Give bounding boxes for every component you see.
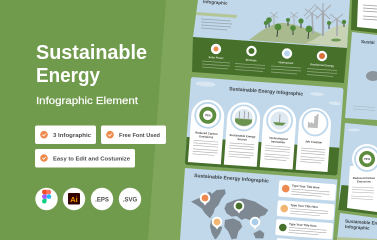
map pin: blue (250, 217, 260, 230)
icon: Adobe Illustrator: Ai (70, 195, 78, 204)
icon: EPS: .EPS (95, 197, 109, 203)
panel: right column sky slide (345, 32, 377, 120)
subtitle: Infographic Element (36, 96, 138, 107)
heading: Sustainable Energy Infographic (229, 86, 303, 98)
icon: Figma (35, 188, 58, 210)
card 3 (260, 104, 297, 170)
heading: Sustainable Energy Infographic (194, 173, 269, 185)
band icons (211, 44, 327, 61)
card text lines (363, 5, 377, 20)
row 3: Type Your Title Here (289, 222, 317, 228)
wind turbines (270, 3, 343, 36)
panel: bottom slide with world map (180, 168, 338, 240)
card 3: Innovation (271, 139, 286, 144)
card 3: Technological (269, 136, 288, 141)
card 1 (188, 99, 225, 164)
sky (180, 168, 338, 240)
sky (185, 77, 344, 176)
sky (193, 0, 350, 48)
chip: Easy to Edit and Costumize: Easy to Edit and Costumize (53, 156, 130, 162)
chip: 3 Infographic: 3 Infographic (53, 133, 91, 139)
card 4: Job Creation (305, 139, 323, 145)
map pin: orange (200, 193, 210, 206)
panel: right column bottom slide (337, 213, 377, 240)
dark green band (192, 37, 347, 83)
format icons (35, 188, 141, 210)
background lighter band (148, 0, 377, 240)
icon: SVG: .SVG (123, 197, 137, 203)
panel: right column bottom slide: Infographic (345, 224, 370, 231)
card 1: 70% (205, 113, 211, 118)
card 1: Reduced Carbon (195, 130, 218, 136)
band labels: Solar Power (208, 55, 224, 60)
map pin: green (234, 201, 244, 214)
row 2: Type Your Title Here (290, 203, 319, 209)
card 2: Sustainable Energy (229, 133, 256, 139)
feature chips (35, 126, 166, 168)
clouds (348, 128, 360, 132)
title: Sustainable (36, 42, 147, 64)
title: Energy (36, 65, 101, 87)
ring icon: 70% (364, 157, 370, 161)
clouds (195, 81, 341, 106)
band labels: Biomass (246, 58, 257, 62)
card 4 (296, 107, 332, 172)
row 1: Type Your Title Here (292, 184, 320, 190)
band labels: Hydropower (278, 60, 294, 65)
world map (191, 189, 268, 239)
map pin: yellow (212, 217, 222, 230)
panel: top slide with wind farm (192, 0, 350, 83)
band labels: Geothermal Energy (310, 62, 335, 68)
body text lines (201, 19, 232, 30)
card 2: Source (237, 137, 247, 142)
panel: middle slide with four arched cards (185, 77, 344, 176)
card 2 (224, 101, 261, 167)
title (36, 42, 147, 87)
lower green area (185, 137, 339, 176)
band labels (208, 55, 335, 68)
row 3 (275, 219, 333, 239)
panel: right column card slide: Emissions (357, 180, 371, 184)
band text lines (202, 61, 337, 76)
trees (264, 17, 346, 42)
panel: right column top slide (351, 0, 377, 33)
panel: right column card slide (338, 123, 377, 215)
card 1: Emissions (199, 134, 214, 139)
white card (357, 0, 377, 29)
row 2 (277, 200, 335, 220)
chip: Free Font Used: Free Font Used (119, 133, 161, 139)
subheading bar (196, 12, 237, 18)
hills (249, 23, 347, 47)
row 4 (277, 238, 300, 240)
panel: right column card slide: Reduced Carbon (353, 176, 375, 180)
row 1 (278, 180, 336, 201)
heading: Sustai (361, 39, 375, 45)
